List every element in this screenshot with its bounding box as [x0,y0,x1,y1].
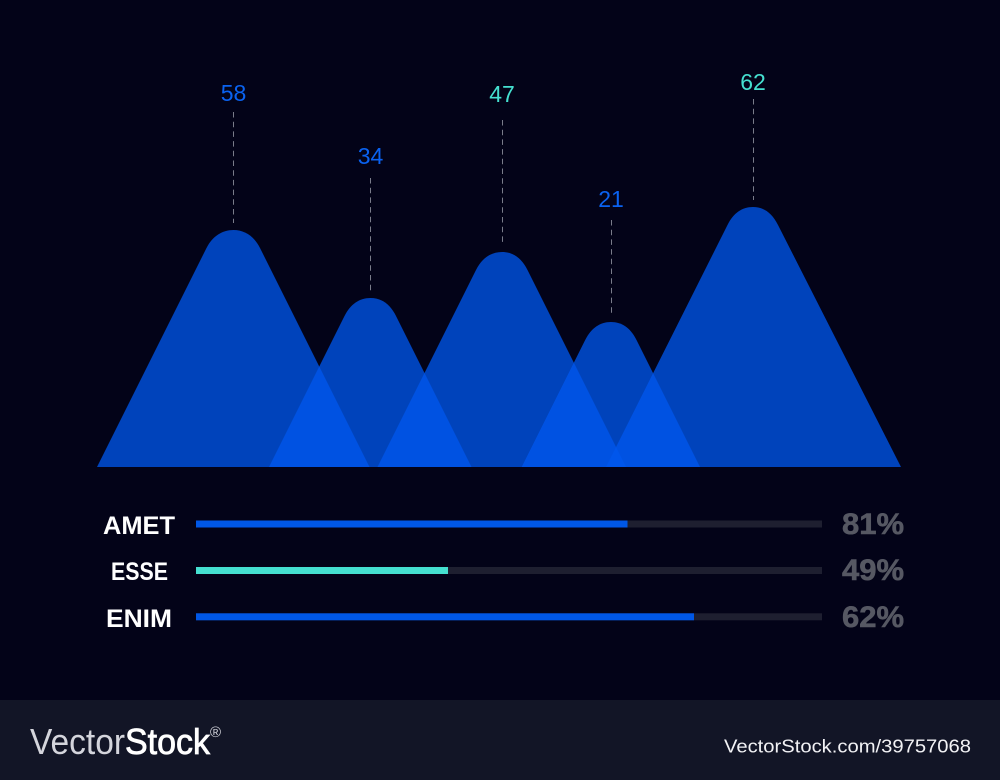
track [196,520,822,528]
label: AMET [103,512,175,540]
source url: VectorStock.com/39757068 [724,736,971,756]
track [196,567,822,574]
peak 47 [378,252,626,467]
mountain area chart [97,207,901,467]
progress row: ENIM [106,601,904,634]
leader 21 [610,220,612,314]
fill [196,613,694,620]
fill [196,567,448,574]
percentage: 49% [842,554,904,587]
progress row: ESSE [111,554,904,587]
peak 58 [97,230,370,467]
value 21: 21 [598,186,624,212]
peak 62 [606,207,901,467]
percentage: 62% [842,601,904,634]
logo: Stock [125,721,211,762]
peak 21 [522,322,700,467]
label: ESSE [111,558,168,586]
progress row: AMET [103,508,904,541]
value 58: 58 [221,80,246,106]
footer bar [0,700,1000,780]
leader 34 [370,178,372,291]
logo [30,721,221,762]
percentage: 81% [842,508,904,541]
label: ENIM [106,605,172,633]
value 62: 62 [740,69,766,95]
logo: Vector [30,721,125,762]
value labels [221,69,766,212]
fill [196,520,628,528]
track [196,613,822,620]
leader 62 [752,99,754,200]
dashed leader lines [234,99,754,314]
leader 47 [502,120,504,242]
leader 58 [232,112,234,223]
peak 34 [269,298,472,467]
logo: ® [210,724,221,741]
value 47: 47 [489,81,515,107]
value 34: 34 [358,143,383,169]
